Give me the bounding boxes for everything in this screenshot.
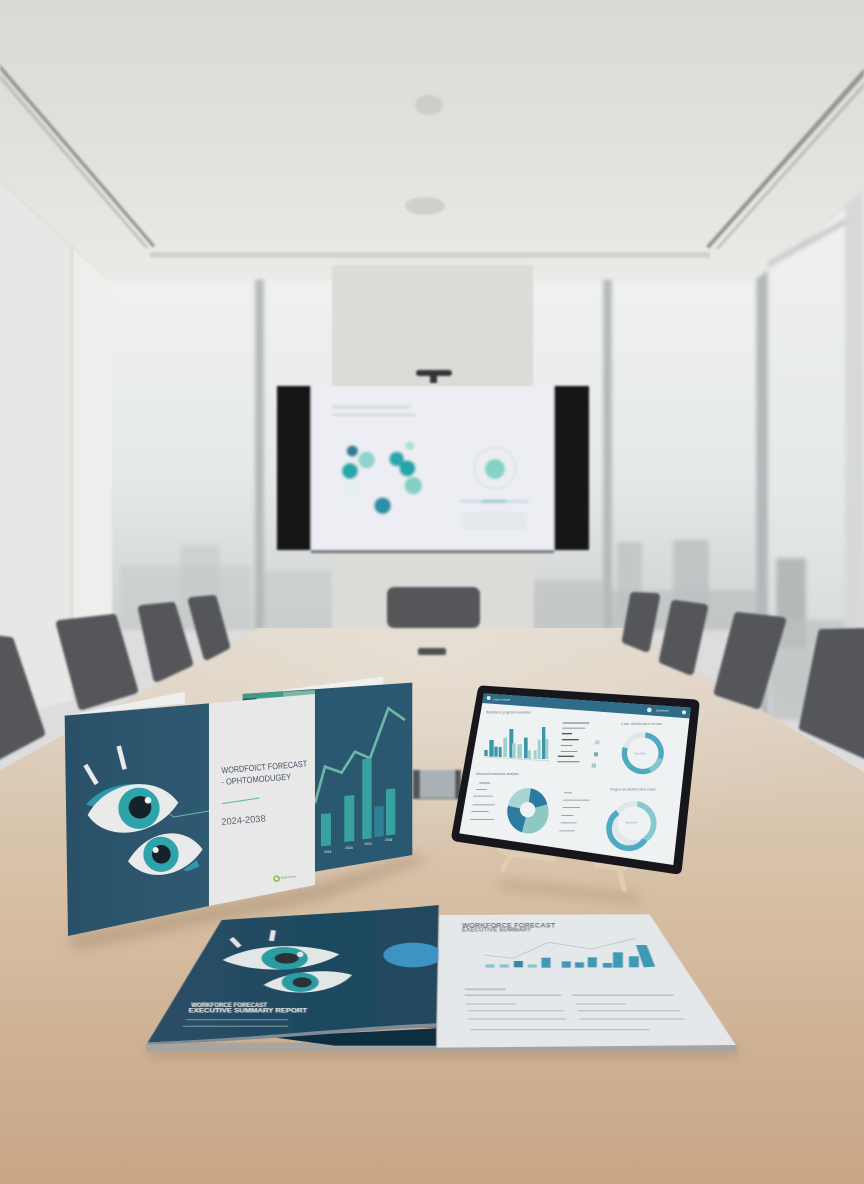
date range: 2024-2038 <box>221 814 266 827</box>
icon: highlight dashes <box>85 746 125 784</box>
far table items <box>413 648 461 799</box>
bar chart <box>321 758 395 846</box>
left page <box>148 905 443 1046</box>
axis labels: 2024 <box>324 850 332 854</box>
back brochure with chart <box>242 682 412 872</box>
centre column behind screen <box>332 265 533 630</box>
chair far left <box>0 639 41 758</box>
chair left 4 <box>192 599 226 656</box>
ceiling <box>0 0 864 281</box>
donut chart top right <box>621 721 662 772</box>
chair far right <box>803 632 864 757</box>
icon: lower eye <box>264 971 352 993</box>
bar chart panel <box>483 710 550 761</box>
connector line <box>169 811 209 817</box>
right page bar chart <box>485 945 655 968</box>
back paper sheet <box>283 677 383 700</box>
donut chart top right: Care distribution trends <box>621 721 662 726</box>
pie legends <box>470 782 589 831</box>
screen content <box>333 406 528 530</box>
right page heading: WORKFORCE FORECAST <box>462 923 555 929</box>
folded report brochures <box>65 658 412 936</box>
windows and city view <box>110 190 864 740</box>
chair right 1 <box>626 596 656 648</box>
chair right 3 <box>718 616 782 705</box>
dashboard header: Index Insight <box>493 697 510 701</box>
axis labels: 2032 <box>364 842 372 846</box>
chairs <box>0 591 864 758</box>
right page text blocks <box>465 988 684 1030</box>
right page: EXECUTIVE SUMMARY <box>462 928 531 934</box>
left page text: EXECUTIVE SUMMARY REPORT <box>189 1006 308 1014</box>
axis labels <box>324 838 393 854</box>
icon: lower eye <box>128 833 203 875</box>
open report on table <box>146 905 737 1052</box>
divider <box>222 798 259 804</box>
axis labels: 2028 <box>345 846 353 850</box>
front cover dark panel <box>65 703 209 936</box>
right page <box>437 914 736 1048</box>
pie chart: Demand breakdown analysis <box>476 772 519 776</box>
green semicircle <box>256 690 315 700</box>
icon: upper eye <box>223 946 339 970</box>
tablet screen <box>459 693 691 865</box>
axis labels: 2038 <box>385 838 393 842</box>
left wall <box>0 178 112 720</box>
cover subtitle: - OPHTOMODUGEY <box>221 772 292 787</box>
donut chart top right: Total 100% <box>634 752 646 755</box>
icon: blue blob <box>383 943 443 967</box>
right page trend line <box>484 938 636 958</box>
conference table <box>0 590 864 1184</box>
page stack <box>146 1042 737 1052</box>
webcam <box>416 370 452 383</box>
icon: upper eye <box>86 784 178 833</box>
logo: Brandname <box>281 874 297 880</box>
cover title: WORDFOICT FORECAST <box>221 759 308 775</box>
front paper sheet <box>75 692 185 715</box>
left page text <box>189 1001 308 1014</box>
chair left 3 <box>142 606 189 678</box>
shadows under standing items <box>68 855 740 1056</box>
left page text: WORKFORCE FORECAST <box>191 1001 268 1009</box>
pie chart <box>476 772 549 834</box>
wall screen <box>277 370 589 553</box>
dashboard header: Dashboard <box>656 709 669 713</box>
bar chart panel: Workforce projection overview <box>486 710 531 714</box>
donut chart bottom right <box>609 787 656 848</box>
donut chart bottom right: Regional distribution rates <box>610 787 656 792</box>
dashboard header <box>482 693 691 718</box>
logo <box>273 874 297 882</box>
icon: highlight dashes <box>231 930 273 947</box>
tablet on stand <box>452 686 699 889</box>
list panel <box>557 722 600 768</box>
line chart <box>315 708 405 803</box>
chair left 2 <box>60 618 134 706</box>
tablet body <box>452 686 699 874</box>
donut chart bottom right: Total 100% <box>625 822 637 825</box>
front cover white panel <box>209 694 315 906</box>
chair centre <box>391 591 476 624</box>
chair right 2 <box>663 604 704 671</box>
wooden stand <box>500 841 625 889</box>
